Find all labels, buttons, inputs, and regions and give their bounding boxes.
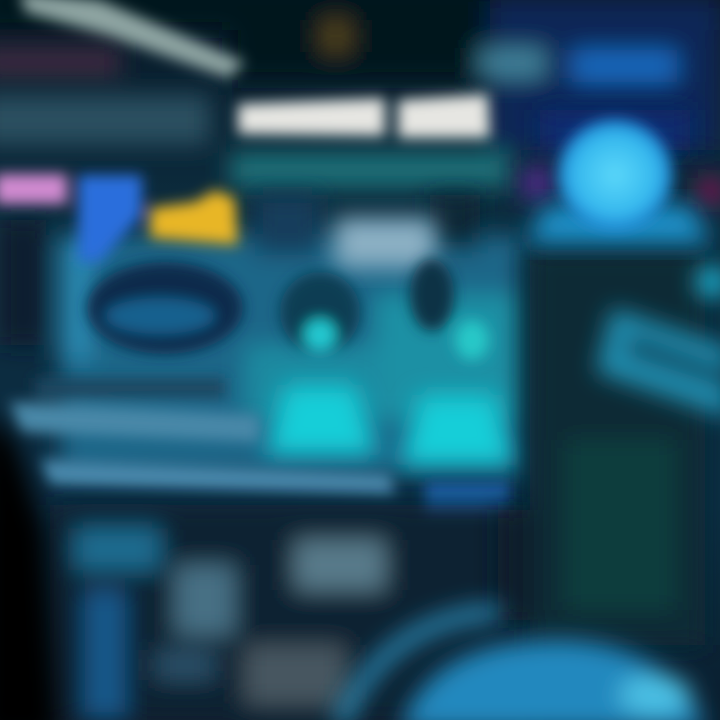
cyan blocks [265,385,515,465]
horizontal bands [10,378,510,524]
grey block [335,218,435,268]
title chunks [238,94,490,138]
orb body [557,119,673,231]
light streak top left [20,0,245,78]
top area [0,0,720,188]
dome body [400,640,705,720]
pink tab [0,174,67,204]
dark rings and cyan spots [280,259,489,360]
orb side accents [522,110,720,204]
bottom right blue dome [340,612,705,720]
angled badge [596,266,720,418]
central panel [0,195,520,475]
dome arc [340,612,500,720]
right server panel [498,250,705,645]
blue tab [78,175,142,262]
black left edge [0,410,58,720]
colour tabs [0,174,238,262]
yellow tab [150,190,238,245]
orb base [525,205,712,244]
dark screen [87,262,243,354]
glowing orb [522,110,720,244]
title blob [238,94,490,138]
lower dark area [50,505,530,720]
